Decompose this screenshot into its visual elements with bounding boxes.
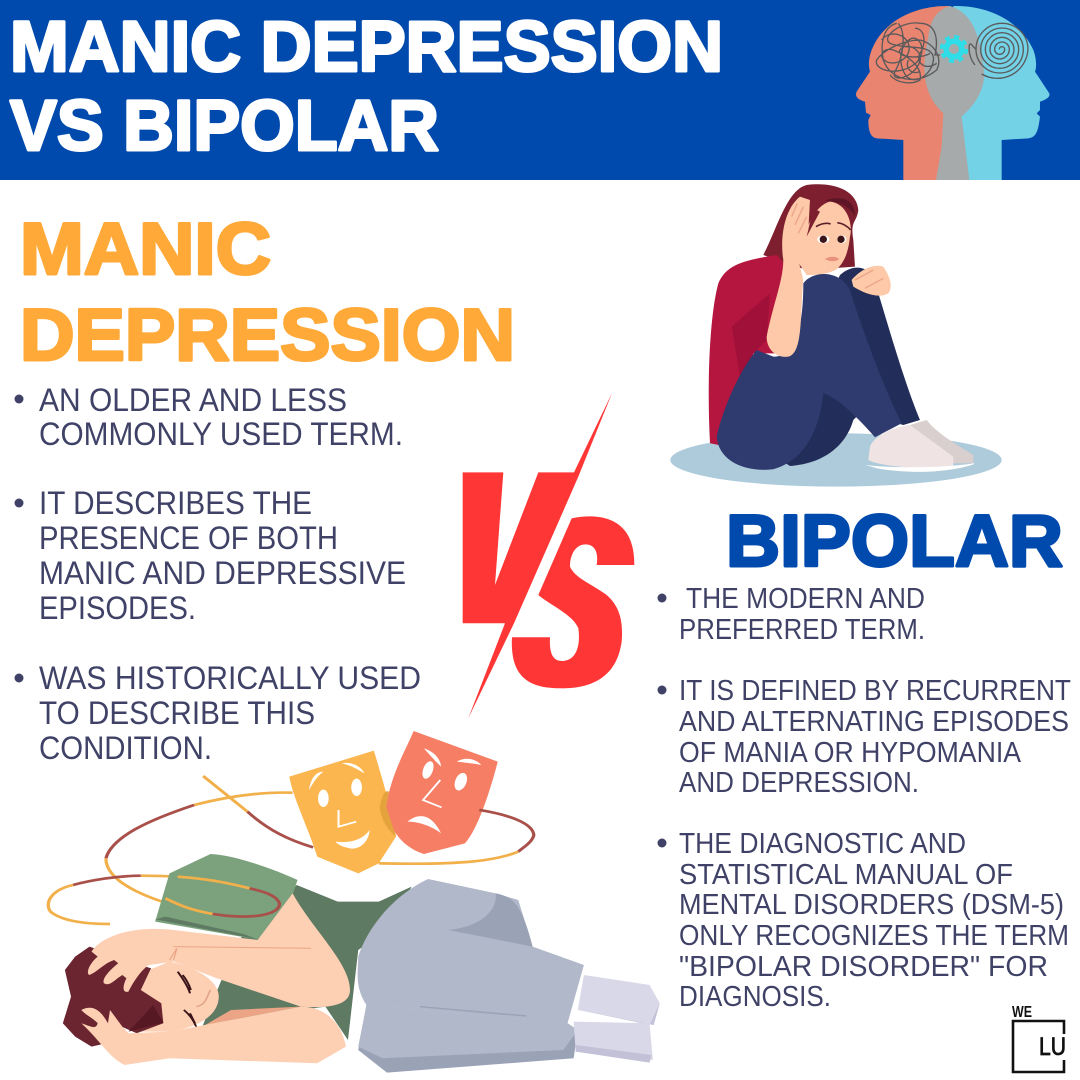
socks	[578, 975, 660, 1025]
bullet 2: OF MANIA OR HYPOMANIA	[679, 737, 1022, 769]
bullet 3: DIAGNOSIS.	[679, 981, 831, 1013]
heading: bipolar: BIPOLAR	[726, 501, 1063, 582]
bullet 3: TO DESCRIBE THIS	[39, 695, 315, 731]
scribble	[876, 23, 940, 83]
bullet 1: THE MODERN AND	[686, 583, 925, 615]
bullet 1	[658, 583, 925, 646]
bullet 3: CONDITION.	[39, 730, 212, 766]
hair	[63, 947, 163, 1047]
bullet 2	[14, 485, 406, 626]
rope over shirt	[165, 877, 279, 917]
icon: red VS lightning mark	[463, 392, 634, 718]
bullet 3: WAS HISTORICALLY USED	[39, 660, 421, 696]
logo: We Level Up mark: WE	[1012, 1004, 1032, 1021]
bullet 1	[14, 382, 403, 452]
logo: We Level Up mark: LU	[1039, 1033, 1066, 1061]
bullet 3: MENTAL DISORDERS (DSM-5)	[679, 889, 1064, 921]
gear	[942, 37, 966, 61]
heading: manic depression: MANIC	[20, 209, 271, 290]
heading: manic depression: DEPRESSION	[20, 295, 515, 376]
title: VS BIPOLAR	[10, 87, 439, 166]
pants	[358, 1005, 578, 1073]
bullet 3: STATISTICAL MANUAL OF	[679, 859, 1013, 891]
logo: We Level Up mark	[1012, 1004, 1066, 1072]
heading: manic depression	[20, 209, 515, 376]
text block: manic depression points	[14, 382, 421, 766]
title: MANIC DEPRESSION	[10, 8, 723, 87]
rope	[48, 776, 313, 924]
bullet 1: AN OLDER AND LESS	[39, 382, 347, 418]
bullet 3	[658, 828, 1069, 1013]
header banner	[0, 0, 1080, 180]
bullet 2: IT DESCRIBES THE	[39, 485, 312, 521]
illustration: sad woman sitting	[670, 184, 1002, 487]
salmon shading and face	[258, 893, 293, 943]
bullet 3: "BIPOLAR DISORDER" FOR	[679, 951, 1048, 983]
bullet 1: PREFERRED TERM.	[679, 614, 925, 646]
bullet 2: MANIC AND DEPRESSIVE	[39, 555, 406, 591]
bullet 1: COMMONLY USED TERM.	[39, 416, 403, 452]
icon: two heads with scribble and spiral	[856, 6, 1050, 180]
spiral	[976, 23, 1028, 78]
lower arm and hand	[81, 1007, 346, 1065]
bullet 2: EPISODES.	[39, 590, 196, 626]
bullet 3	[14, 660, 421, 766]
upper arm and hand	[88, 893, 350, 1007]
bullet 2	[658, 675, 1071, 799]
green shirt	[202, 885, 412, 1040]
text block: bipolar points	[658, 583, 1071, 1013]
bullet 2: PRESENCE OF BOTH	[39, 520, 338, 556]
bullet 3: THE DIAGNOSTIC AND	[679, 828, 966, 860]
bullet 2: AND DEPRESSION.	[679, 767, 919, 799]
masks	[289, 731, 534, 873]
illustration: man lying with masks	[48, 731, 660, 1073]
title	[10, 8, 723, 166]
